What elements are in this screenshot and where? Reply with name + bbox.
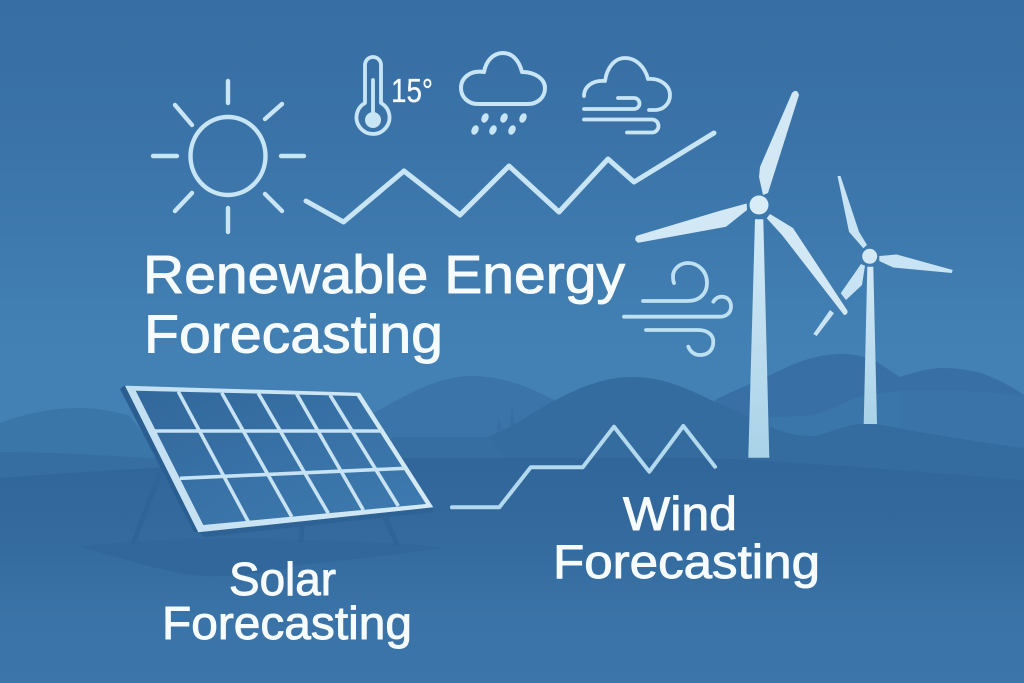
icon: thermometer: [356, 57, 389, 134]
line chart: wind output: [452, 426, 715, 507]
line chart: weather trend: [306, 133, 714, 222]
label: solar forecasting: Forecasting: [162, 597, 412, 649]
solar panel: [120, 385, 433, 546]
ground: [0, 458, 1024, 683]
label: wind forecasting: [553, 487, 820, 588]
panel grid: [153, 392, 405, 522]
icon: rain cloud: [461, 53, 545, 136]
large wind turbine: [635, 91, 848, 458]
title: Renewable Energy: [143, 245, 625, 305]
blades: [813, 176, 953, 336]
blades: [635, 91, 848, 315]
label: wind forecasting: Forecasting: [553, 535, 820, 588]
small wind turbine: [813, 176, 953, 424]
hub: [750, 196, 768, 214]
panel frame: [125, 386, 433, 532]
label: wind forecasting: Wind: [623, 487, 737, 540]
hub: [862, 249, 877, 264]
panel cells: [136, 391, 426, 525]
icon: windy cloud: [584, 58, 670, 132]
title: Forecasting: [144, 304, 443, 364]
temperature reading: 15°: [391, 72, 433, 109]
label: solar forecasting: [162, 553, 412, 649]
panel legs: [133, 473, 398, 546]
panel edge: [120, 385, 200, 532]
title: [143, 245, 625, 364]
icon: sun: [153, 81, 304, 232]
tower: [864, 267, 877, 424]
icon: wind gusts: [624, 263, 731, 355]
tower: [748, 219, 769, 458]
label: solar forecasting: Solar: [229, 553, 336, 605]
background hills: [0, 354, 1024, 490]
solar panel shadow: [80, 539, 443, 576]
